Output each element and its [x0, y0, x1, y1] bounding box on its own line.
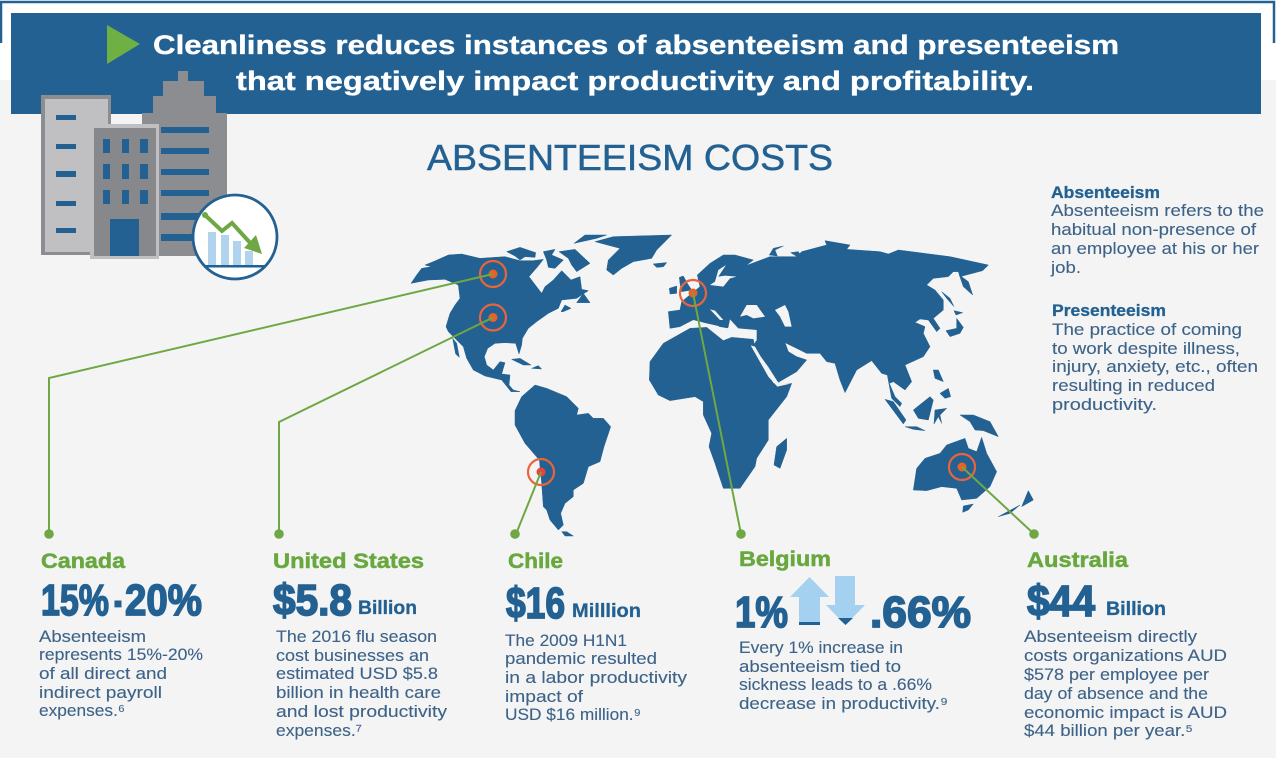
- panel: Canada: expenses.⁶: [39, 702, 125, 720]
- left building: [41, 95, 111, 255]
- panel: Australia: costs organizations AUD: [1024, 647, 1227, 665]
- panel: Chile: The 2009 H1N1: [505, 632, 627, 650]
- panel: Belgium: sickness leads to a .66%: [739, 676, 932, 694]
- definition: presenteeism: resulting in reduced: [1052, 377, 1215, 395]
- panel: Australia: $44: [1027, 577, 1095, 626]
- tall tower: [142, 71, 227, 256]
- panel: United States: cost businesses an: [276, 647, 429, 665]
- panel: Australia: economic impact is AUD: [1024, 704, 1227, 722]
- marker: Chile: [510, 459, 554, 539]
- icon: down arrow: [826, 576, 865, 625]
- panel: Australia: Absenteeism directly: [1024, 628, 1198, 646]
- panel: Canada: 20%: [125, 576, 202, 625]
- header banner: [11, 13, 1261, 114]
- panel: Chile: Chile: [508, 550, 563, 573]
- icon: up arrow: [790, 577, 829, 625]
- panel: Canada: Canada: [41, 550, 125, 573]
- panel: Belgium: Every 1% increase in: [739, 639, 903, 657]
- panel: United States: and lost productivity: [276, 703, 448, 721]
- icon: office buildings with declining chart: [41, 71, 277, 279]
- definition: presenteeism: to work despite illness,: [1052, 340, 1240, 358]
- panel: Chile: USD $16 million.⁹: [505, 706, 641, 724]
- definition: presenteeism: injury, anxiety, etc., often: [1052, 358, 1258, 376]
- panel: United States: estimated USD $5.8: [276, 665, 438, 683]
- panel: Belgium: [735, 548, 971, 713]
- panel: Chile: impact of: [505, 688, 583, 706]
- panel: United States: United States: [273, 550, 424, 573]
- panel: United States: [273, 550, 448, 740]
- title: ABSENTEEISM COSTS: [427, 137, 833, 178]
- panel: Chile: in a labor productivity: [505, 669, 688, 687]
- definition: presenteeism: productivity.: [1052, 396, 1157, 414]
- panel: Canada: -: [114, 576, 122, 625]
- panel: Australia: day of absence and the: [1024, 685, 1208, 703]
- headline: that negatively impact productivity and profitability.: [236, 66, 1034, 96]
- front building: [90, 124, 159, 259]
- definition: absenteeism: [1050, 184, 1264, 277]
- panel: Belgium: Belgium: [739, 548, 831, 571]
- definition: presenteeism: [1052, 302, 1258, 414]
- panel: Belgium: 1%: [735, 588, 788, 637]
- definition: absenteeism: Absenteeism: [1051, 184, 1160, 202]
- panel: Canada: indirect payroll: [39, 684, 162, 702]
- marker: Belgium: [680, 280, 746, 539]
- world map: [411, 235, 1033, 536]
- panel: Canada: of all direct and: [39, 665, 167, 683]
- headline: [153, 30, 1119, 96]
- chart badge: [193, 195, 277, 279]
- panel: United States: The 2016 flu season: [276, 628, 437, 646]
- panel: Chile: Milllion: [572, 601, 641, 622]
- panel: Australia: [1024, 549, 1227, 740]
- panel: Belgium: decrease in productivity.⁹: [739, 695, 948, 713]
- panel: Chile: [505, 550, 688, 724]
- panel: Chile: pandemic resulted: [505, 650, 657, 668]
- map markers and leader lines: [44, 261, 1039, 539]
- marker: United States: [274, 304, 506, 539]
- panel: Canada: 15%: [41, 576, 109, 625]
- headline: Cleanliness reduces instances of absenteeism and presenteeism: [153, 30, 1119, 60]
- panel: United States: expenses.⁷: [276, 722, 362, 740]
- marker: Australia: [949, 454, 1039, 539]
- definition: presenteeism: Presenteeism: [1052, 302, 1166, 320]
- definition: absenteeism: job.: [1050, 259, 1081, 277]
- panel: Canada: Absenteeism: [39, 628, 146, 646]
- icon: green play triangle: [107, 25, 140, 64]
- panel: United States: $5.8: [273, 576, 352, 625]
- definition: presenteeism: The practice of coming: [1052, 321, 1242, 339]
- definition: absenteeism: habitual non-presence of: [1051, 221, 1256, 239]
- panel: Belgium: absenteeism tied to: [739, 658, 901, 676]
- panel: United States: billion in health care: [276, 684, 441, 702]
- panel: Belgium: .66%: [870, 588, 971, 637]
- panel: Australia: $578 per employee per: [1024, 666, 1210, 684]
- panel: Australia: $44 billion per year.⁵: [1024, 722, 1193, 740]
- panel: Australia: Billion: [1106, 599, 1166, 620]
- definition: absenteeism: Absenteeism refers to the: [1051, 202, 1264, 220]
- panel: Canada: represents 15%-20%: [39, 646, 203, 664]
- marker: Canada: [44, 261, 506, 539]
- panel: Australia: Australia: [1027, 549, 1128, 572]
- panel: Canada: [39, 550, 203, 720]
- panel: Chile: $16: [506, 579, 565, 628]
- definition: absenteeism: an employee at his or her: [1051, 240, 1260, 258]
- panel: United States: Billion: [358, 598, 417, 619]
